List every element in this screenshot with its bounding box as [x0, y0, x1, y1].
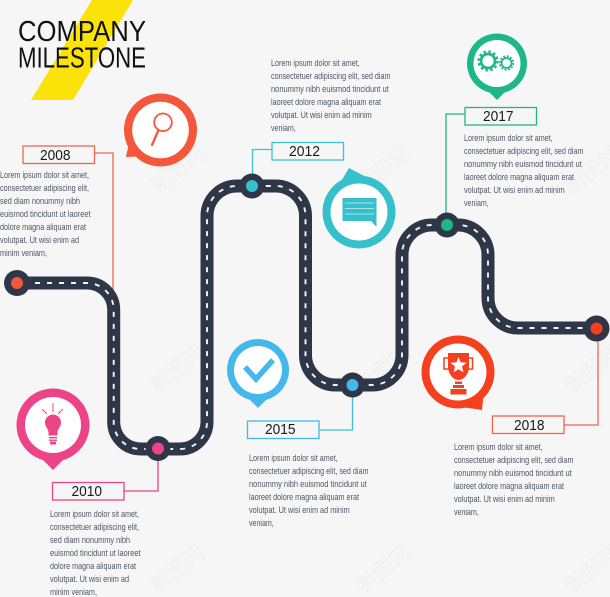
text block: 2010: sed diam nonummy nibh: [50, 535, 130, 545]
road node: 2018: [584, 316, 610, 342]
text block: 2018: laoreet dolore magna aliquam erat: [454, 481, 564, 491]
year label: 2017: 2017: [483, 108, 514, 125]
year label: 2018: 2018: [514, 417, 544, 434]
year label: 2015: 2015: [265, 421, 296, 438]
text block: 2010: Lorem ipsum dolor sit amet,: [50, 509, 139, 519]
text block: 2012: [271, 58, 391, 133]
text block: 2015: [249, 453, 369, 528]
year label: 2012: 2012: [289, 143, 320, 160]
title: MILESTONE: [18, 42, 146, 74]
connector: 2012: [252, 150, 272, 178]
year label: 2015: [248, 421, 319, 438]
road node: start: [4, 270, 30, 296]
year label: 2008: [23, 146, 94, 164]
road node: 2017: [434, 212, 460, 238]
text: 新图网: [143, 138, 211, 201]
icon: trophy badge: [422, 336, 494, 410]
title accent: yellow parallelogram: [31, 0, 133, 100]
connector: 2015: [319, 392, 352, 430]
connector: 2017: [446, 114, 465, 218]
text: 新图网: [349, 138, 417, 201]
text: 新图网: [349, 337, 417, 400]
text block: 2017: laoreet dolore magna aliquam erat: [464, 172, 574, 182]
text block: 2010: volutpat. Ut wisi enim ad: [50, 574, 129, 584]
icon: chat badge: [322, 168, 396, 248]
text block: 2018: nonummy nibh euismod tincidunt ut: [454, 468, 572, 478]
year label: 2010: 2010: [72, 483, 102, 500]
text block: 2012: veniam,: [271, 123, 296, 133]
icon: check mark badge: [227, 339, 289, 408]
text block: 2010: euismod tincidunt ut laoreet: [50, 548, 141, 558]
text block: 2017: [464, 133, 584, 208]
text block: 2017: volutpat. Ut wisi enim ad minim: [464, 185, 565, 195]
text block: 2015: Lorem ipsum dolor sit amet,: [249, 453, 338, 463]
text block: 2008: Lorem ipsum dolor sit amet,: [0, 170, 89, 180]
text block: 2012: Lorem ipsum dolor sit amet,: [271, 58, 360, 68]
road node: 2010: [146, 436, 170, 461]
text block: 2008: euismod tincidunt ut laoreet: [0, 209, 91, 219]
text block: 2017: veniam,: [464, 198, 489, 208]
text block: 2018: veniam,: [454, 507, 479, 517]
text block: 2010: dolore magna aliquam erat: [50, 561, 136, 571]
road node: 2015: [340, 372, 365, 398]
title: [18, 16, 146, 74]
text block: 2018: Lorem ipsum dolor sit amet,: [454, 442, 543, 452]
text block: 2015: veniam,: [249, 518, 274, 528]
text block: 2008: consectetuer adipiscing elit,: [0, 183, 89, 193]
year label: 2008: 2008: [40, 147, 70, 164]
connector: 2008: [95, 153, 113, 295]
text block: 2015: laoreet dolore magna aliquam erat: [249, 492, 359, 502]
text block: 2015: nonummy nibh euismod tincidunt ut: [249, 479, 367, 489]
connector: 2018: [564, 335, 598, 425]
text block: 2008: volutpat. Ut wisi enim ad: [0, 235, 79, 245]
icon: light bulb badge: [16, 388, 90, 470]
winding road: [17, 186, 597, 449]
icon: gears badge: [467, 34, 527, 100]
text block: 2018: consectetuer adipiscing elit, sed diam: [454, 455, 574, 465]
text block: 2012: consectetuer adipiscing elit, sed diam: [271, 71, 391, 81]
title: COMPANY: [18, 16, 146, 48]
text block: 2017: nonummy nibh euismod tincidunt ut: [464, 159, 582, 169]
text block: 2018: [454, 442, 574, 517]
text block: 2015: consectetuer adipiscing elit, sed diam: [249, 466, 369, 476]
year label: 2012: [272, 142, 344, 160]
icon: magnifier badge: [124, 94, 197, 166]
text block: 2012: volutpat. Ut wisi enim ad minim: [271, 110, 372, 120]
text: 新图网: [143, 337, 211, 400]
text block: 2017: Lorem ipsum dolor sit amet,: [464, 133, 553, 143]
text block: 2012: laoreet dolore magna aliquam erat: [271, 97, 381, 107]
text block: 2008: sed diam nonummy nibh: [0, 196, 80, 206]
text block: 2010: [50, 509, 141, 597]
text block: 2008: minim veniam,: [0, 248, 47, 258]
text block: 2015: volutpat. Ut wisi enim ad minim: [249, 505, 350, 515]
connector: 2010: [124, 456, 158, 491]
text block: 2008: dolore magna aliquam erat: [0, 222, 86, 232]
text block: 2010: consectetuer adipiscing elit,: [50, 522, 139, 532]
year label: 2018: [492, 416, 564, 434]
year label: 2017: [465, 108, 536, 125]
text block: 2018: volutpat. Ut wisi enim ad minim: [454, 494, 555, 504]
road node: 2012: [240, 174, 264, 198]
year label: 2010: [52, 482, 124, 500]
text block: 2012: nonummy nibh euismod tincidunt ut: [271, 84, 389, 94]
text block: 2008: [0, 170, 91, 258]
text block: 2010: minim veniam,: [50, 587, 97, 597]
